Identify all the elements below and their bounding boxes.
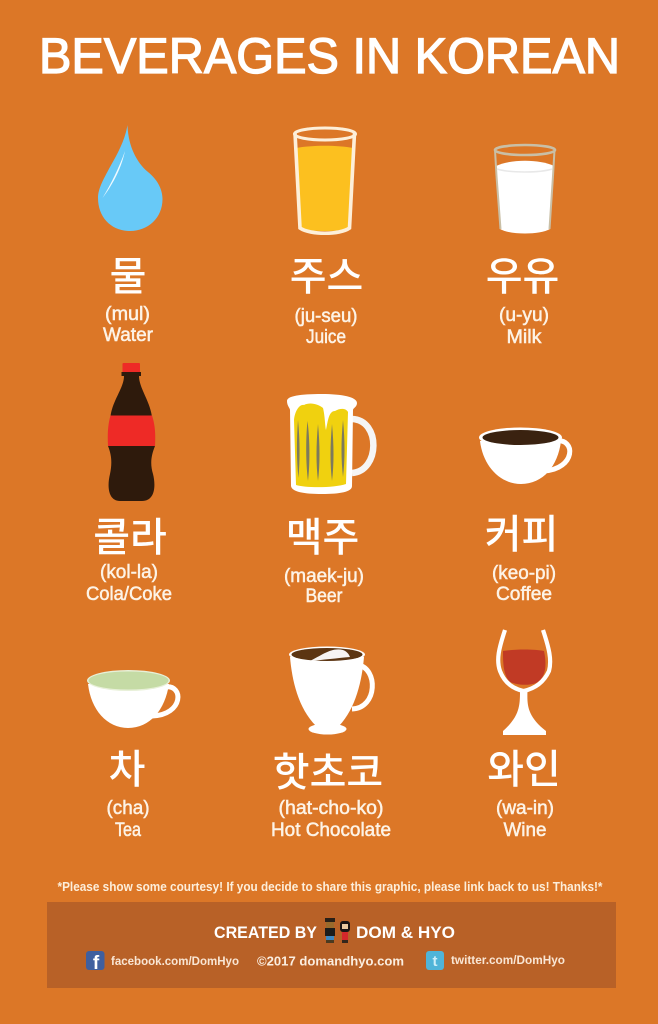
English: Wine: Wine (504, 820, 546, 841)
icon: Hyo character (340, 921, 350, 943)
romanization: cha: (cha) (106, 798, 150, 819)
title: BEVERAGES IN KOREAN (39, 28, 620, 84)
panel: cola (86, 363, 172, 605)
icon: twitter (426, 951, 444, 970)
English: Milk: Milk (506, 327, 542, 348)
romanization: keo-pi: (keo-pi) (492, 563, 556, 584)
icon: juice glass (294, 128, 356, 233)
romanization: wa-in: (wa-in) (496, 798, 554, 819)
English: Hot Chocolate: Hot Chocolate (271, 820, 391, 841)
panel: beer (284, 394, 373, 607)
panel: milk (486, 145, 559, 348)
icon: facebook (86, 951, 104, 974)
panel: coffee (479, 428, 570, 605)
created by label: CREATED BY (214, 923, 318, 942)
footer panel (47, 902, 616, 988)
English: Beer: Beer (306, 586, 343, 607)
romanization: u-yu: (u-yu) (499, 305, 549, 326)
panel: juice (290, 128, 363, 348)
Korean word: hat-cho-ko: 핫초코 (273, 751, 383, 795)
copyright: ©2017 domandhyo.com (257, 954, 404, 968)
icon: facebook: f (93, 953, 100, 974)
Korean word: ju-seu: 주스 (290, 255, 363, 299)
English: Tea: Tea (115, 820, 141, 841)
panel: wine (487, 630, 561, 841)
Korean word: u-yu: 우유 (486, 255, 559, 299)
romanization: kol-la: (kol-la) (100, 562, 158, 583)
Korean word: kol-la: 콜라 (93, 516, 167, 560)
romanization: hat-cho-ko: (hat-cho-ko) (278, 798, 384, 819)
icon: milk glass (495, 145, 555, 234)
Korean word: cha: 차 (109, 748, 145, 792)
panel: water (98, 125, 162, 346)
Korean word: maek-ju: 맥주 (286, 516, 359, 560)
Korean word: wa-in: 와인 (487, 748, 561, 792)
icon: hot chocolate mug (289, 646, 372, 734)
icon: water drop (98, 125, 162, 231)
English: Water: Water (103, 325, 154, 346)
icon: cola bottle (108, 363, 155, 501)
icon: beer mug (287, 394, 373, 494)
icon: twitter: t (432, 953, 438, 970)
romanization: mul: (mul) (105, 304, 150, 325)
Dom and Hyo label: DOM & HYO (356, 923, 455, 942)
panel: tea (87, 670, 178, 841)
icon: wine glass (498, 630, 550, 735)
courtesy notice: *Please show some courtesy! If you decide to share this graphic, please link back to us! Thanks!* (58, 880, 603, 894)
icon: Dom character (325, 918, 335, 943)
Korean word: keo-pi: 커피 (485, 513, 558, 557)
icon: coffee cup (479, 428, 570, 484)
facebook link: facebook.com/DomHyo (111, 954, 239, 968)
English: Coffee: Coffee (496, 584, 552, 605)
Korean word: mul: 물 (110, 255, 146, 299)
romanization: ju-seu: (ju-seu) (294, 306, 358, 327)
English: Cola/Coke: Cola/Coke (86, 584, 172, 605)
panel: hot chocolate (271, 646, 391, 841)
romanization: maek-ju: (maek-ju) (284, 566, 364, 587)
icon: tea cup (87, 670, 178, 728)
English: Juice: Juice (306, 327, 346, 348)
twitter link: twitter.com/DomHyo (451, 953, 565, 967)
